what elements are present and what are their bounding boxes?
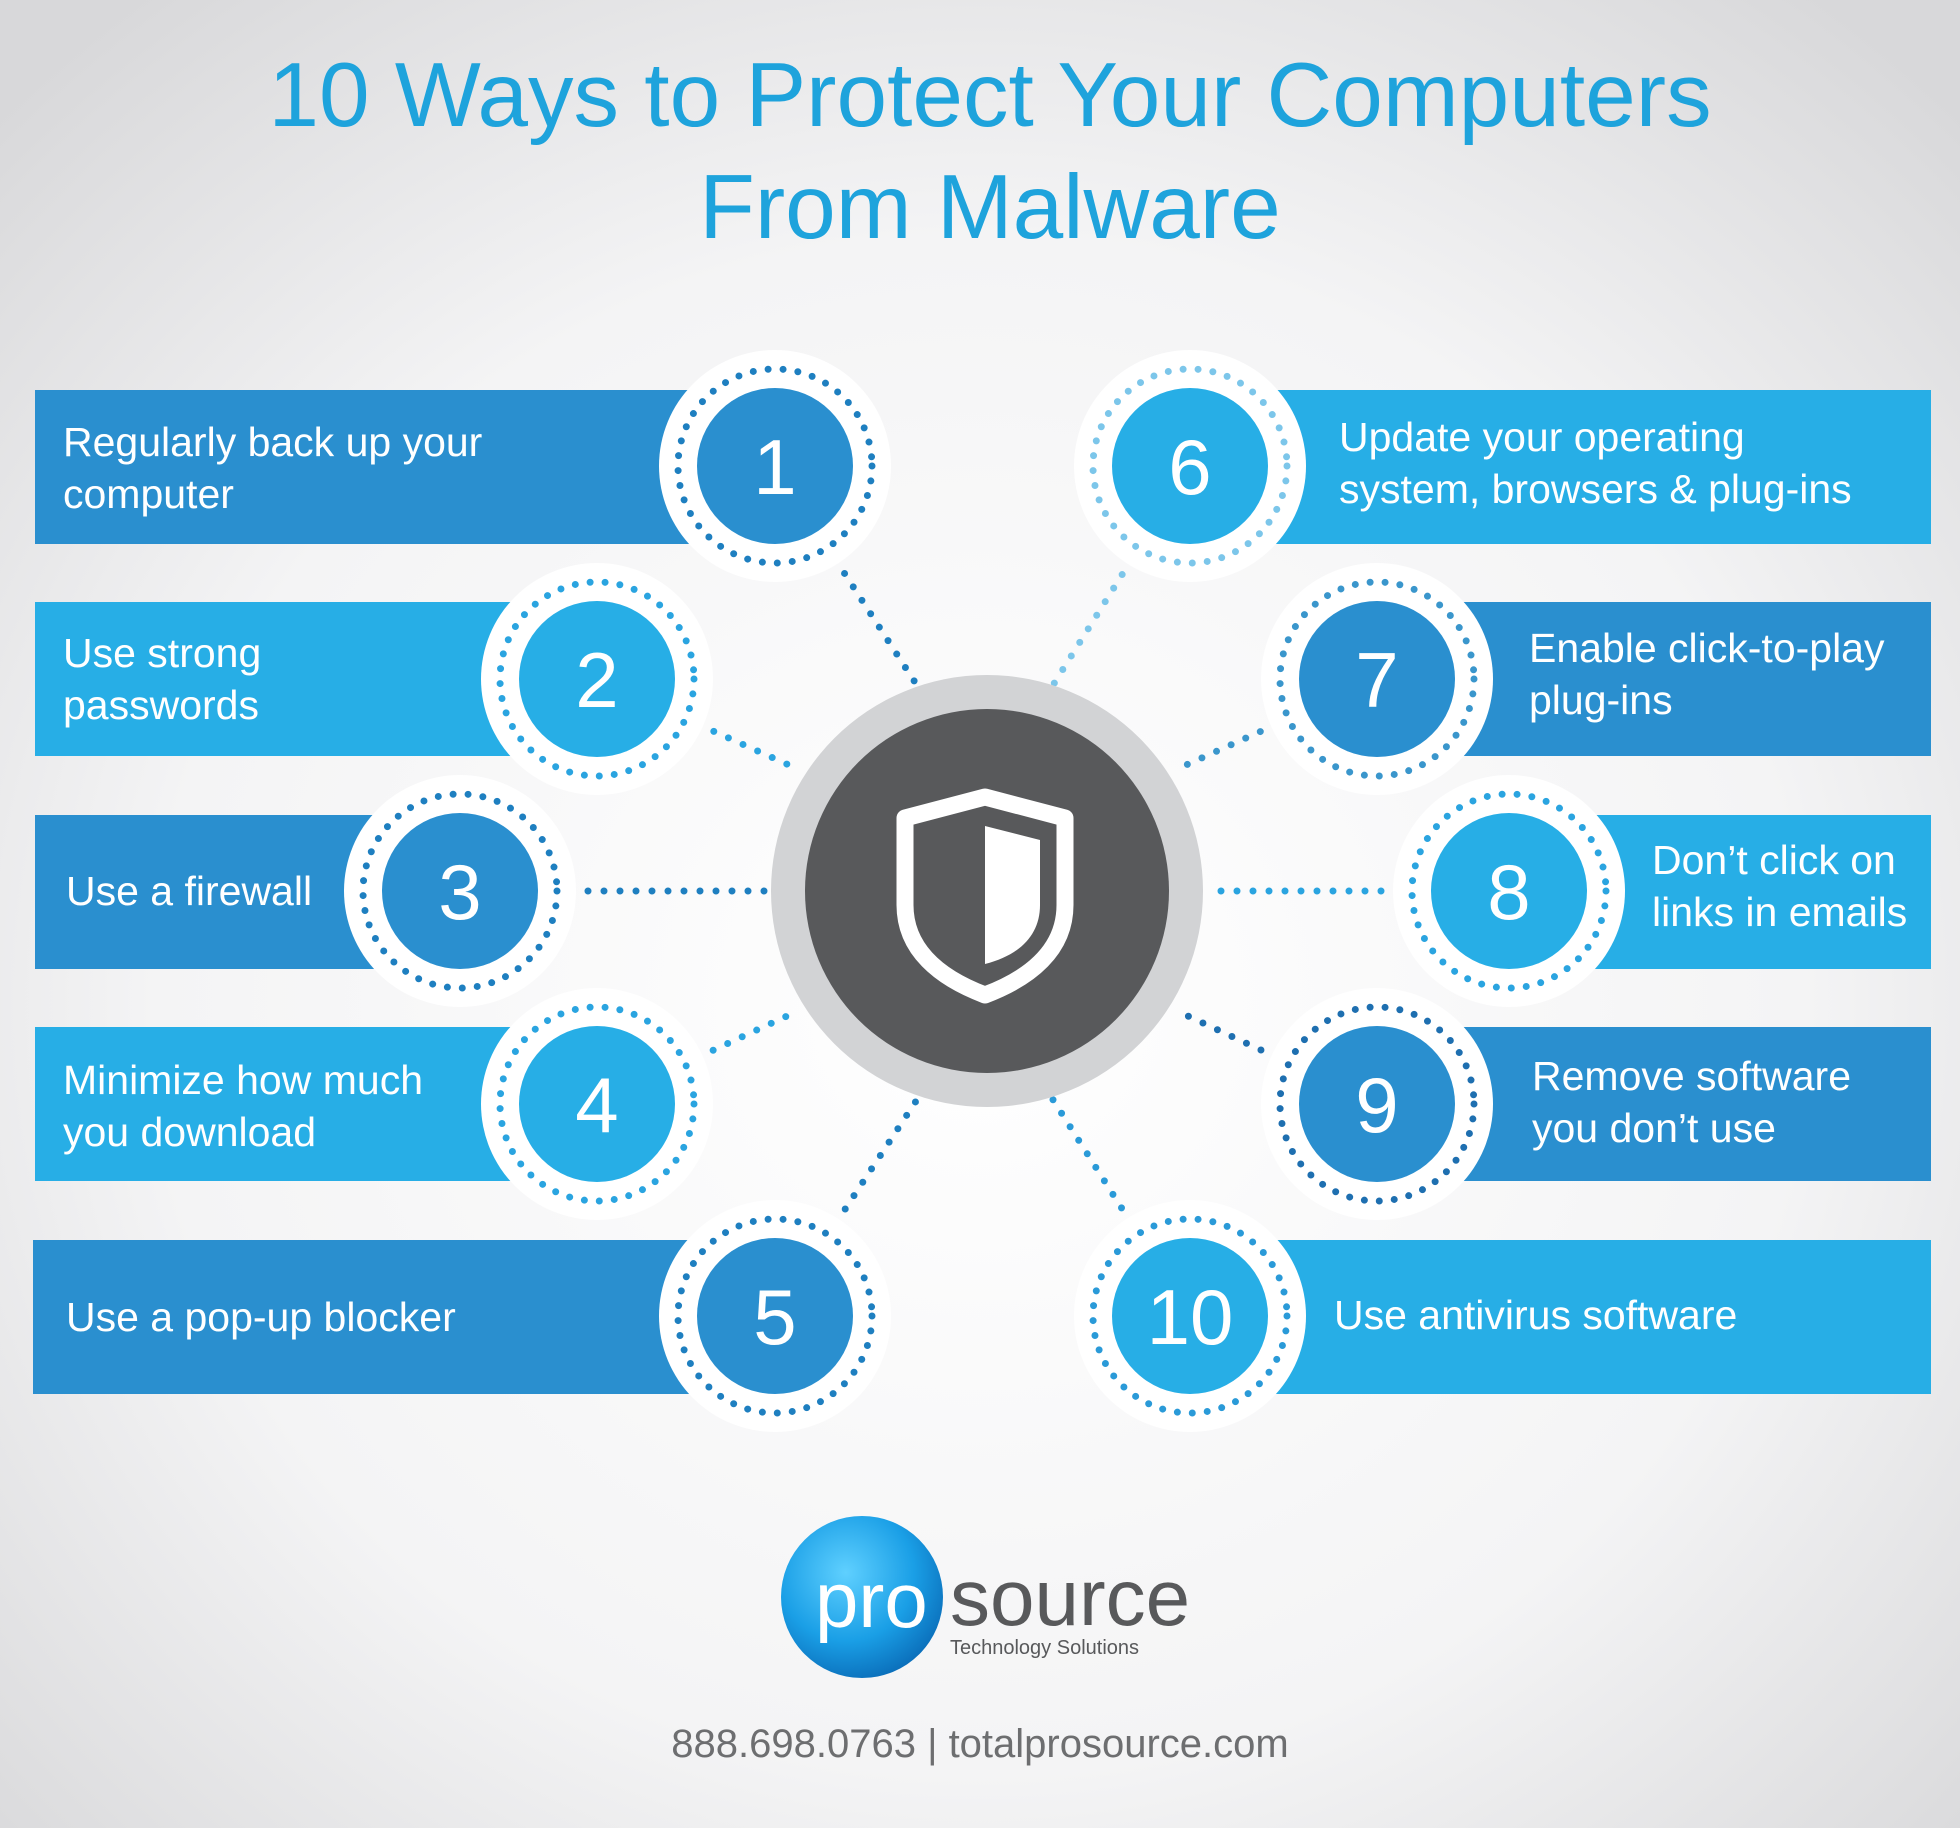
bar texts: links in emails <box>1652 889 1907 935</box>
bar texts: Update your operating <box>1339 414 1745 460</box>
bar texts: you don’t use <box>1532 1105 1776 1151</box>
numbered circles: 5 <box>753 1273 797 1361</box>
bar texts: Minimize how much <box>63 1057 423 1103</box>
logo: pro <box>815 1556 928 1644</box>
numbered circles: 8 <box>1487 848 1531 936</box>
numbered circles: 3 <box>438 848 482 936</box>
bars <box>33 390 1931 1394</box>
bar texts: system, browsers & plug-ins <box>1339 466 1852 512</box>
numbered circles: 9 <box>1355 1061 1399 1149</box>
bar texts: Regularly back up your <box>63 419 482 465</box>
bar texts: Use antivirus software <box>1334 1292 1737 1338</box>
bar texts: passwords <box>63 682 259 728</box>
bar texts: Enable click-to-play <box>1529 625 1885 671</box>
logo: source <box>950 1553 1190 1642</box>
bar texts: Use a pop-up blocker <box>66 1294 456 1340</box>
connectors <box>460 466 1509 1316</box>
title <box>268 45 1712 258</box>
bar texts: plug-ins <box>1529 677 1673 723</box>
bar texts: you download <box>63 1109 316 1155</box>
bar texts: Use strong <box>63 630 261 676</box>
bar texts: Use a firewall <box>66 868 312 914</box>
bar texts: computer <box>63 471 234 517</box>
bar texts: Don’t click on <box>1652 837 1896 883</box>
title: 10 Ways to Protect Your Computers <box>268 45 1712 146</box>
numbered circles: 10 <box>1147 1273 1233 1361</box>
numbered circles: 6 <box>1168 423 1212 511</box>
logo: Technology Solutions <box>950 1637 1139 1659</box>
numbered circles: 1 <box>753 423 797 511</box>
numbered circles: 7 <box>1355 636 1399 724</box>
numbered circles: 2 <box>575 636 619 724</box>
footer contact: 888.698.0763 | totalprosource.com <box>671 1722 1289 1766</box>
numbered circles: 4 <box>575 1061 619 1149</box>
logo <box>781 1516 1190 1678</box>
numbered circles <box>344 350 1625 1432</box>
bar texts: Remove software <box>1532 1053 1851 1099</box>
center shield emblem <box>771 675 1203 1107</box>
bar texts <box>63 414 1907 1340</box>
title: From Malware <box>699 157 1281 258</box>
